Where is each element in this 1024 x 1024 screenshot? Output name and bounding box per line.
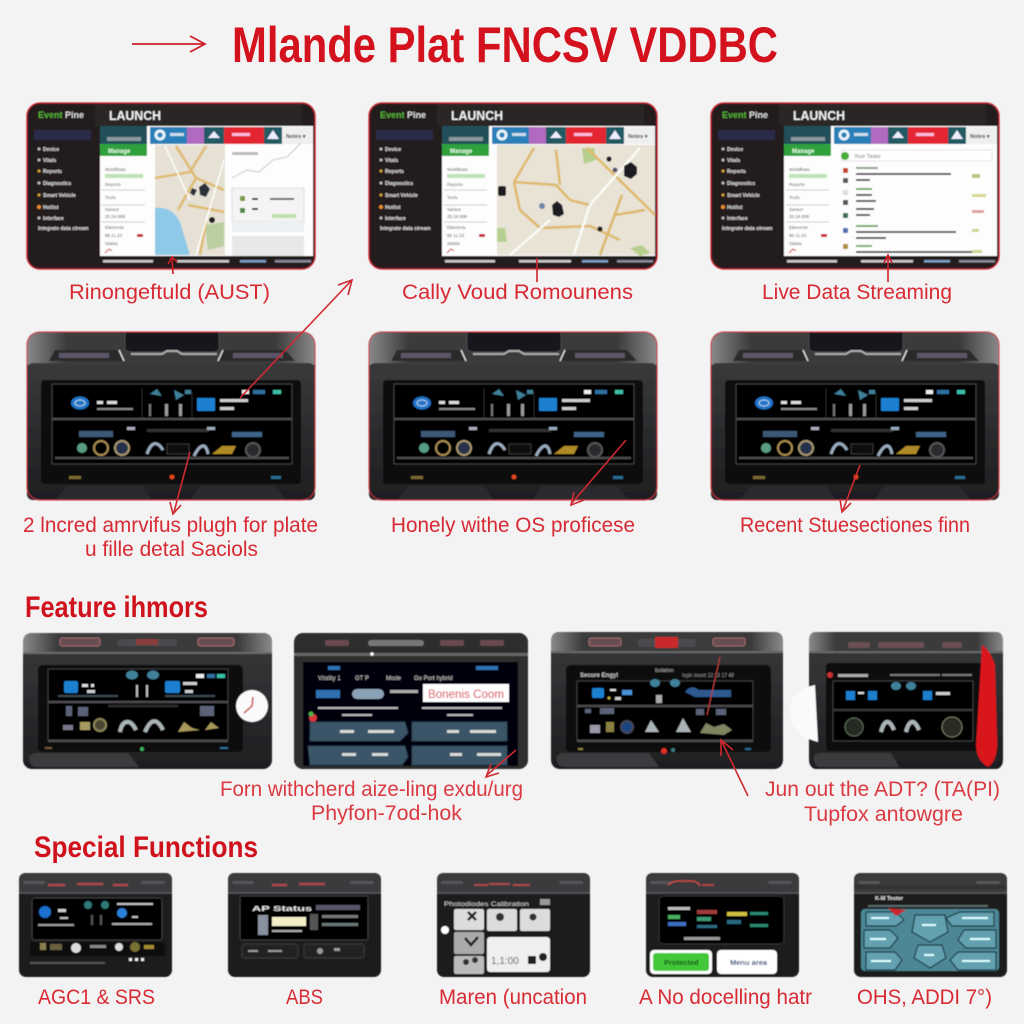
panel: device one [27,332,315,500]
button: white action [717,950,777,974]
panel: ABS device [228,873,381,977]
arrow: device three callout [840,465,860,512]
map: city with bay [155,145,225,255]
arrow: device one callout [170,452,190,514]
label: panel one: Rinongeftuld (AUST) [69,281,270,304]
panel: feature device two [294,633,528,769]
label: feature right [765,778,1000,826]
label: feature right: Jun out the ADT? (TA(PI) [765,778,1000,801]
panel: manual function device: Photodiodes Calibration [444,901,529,908]
arrow: panel three marker [884,255,892,282]
panel: feature device two: Vitality 1 [318,676,341,682]
heading: features: Feature ihmors [25,591,208,624]
label: AGC and SRS: AGC1 & SRS [38,986,155,1009]
arrow: device two feature callout [486,750,516,777]
panel: map and chart screen [27,103,315,269]
panel: feature device one [23,633,272,769]
arrow: device three feature callout [721,740,748,796]
panel: teal diagram device: K-M Tester [875,896,904,902]
panel: feature device four [790,632,1003,769]
label: feature left: Phyfon-7od-hok [311,802,463,825]
panel: green and white button device [646,873,799,977]
label: device two: Honely withe OS proficese [391,514,635,537]
button: green action [650,950,712,974]
label: manual function: Maren (uncation [439,986,587,1009]
panel: live data screen [711,103,999,269]
label: ABS: ABS [286,986,323,1009]
label: feature left: Forn withcherd aize-ling exdu/urg [220,778,523,801]
arrow: panel one marker [168,257,177,274]
panel: feature device two: Go Port hybrid [414,676,453,682]
panel: ABS device: AP Status [252,906,312,913]
panel: feature device three: Isolation [655,668,674,674]
icon: clock badge [236,690,268,722]
label: OHS: OHS, ADDI 7°) [857,986,992,1009]
panel: full map screen [369,103,657,269]
panel: feature device three [551,632,783,769]
label: feature left [220,778,523,825]
panel: feature device two: GT P [355,676,369,682]
label: device one: u fille detal Saciols [85,538,258,561]
panel: manual function device: 1,1:00 [491,956,519,967]
buttons: function grid [454,909,550,974]
panel: AGC and SRS device [19,873,172,977]
panel: teal diagram device [854,873,1007,977]
map: road network [497,145,655,256]
icon: white side tab [790,685,818,742]
label: feature right: Tupfox antowgre [804,803,963,826]
arrow: diagonal callout to upper row [240,280,352,398]
arrow: title pointer [132,36,205,52]
panel: manual function device [437,873,590,977]
callout: red label box: Bonenis Coom [428,689,504,701]
panel: device three [711,332,999,500]
label: device three: Recent Stuesectiones finn [740,514,970,537]
panel: device two [369,332,657,500]
panel: live data screen: Your Tasks [854,154,881,160]
button: green action: Protected [664,958,699,967]
button: white action: Menu area [730,958,768,967]
label: panel two: Cally Voud Romounens [402,281,633,304]
arrow: faint interior pointer [707,657,720,715]
panel: feature device three: Secure Engyl [580,673,618,679]
callout: red label box [423,684,509,702]
label: docelling: A No docelling hatr [639,986,812,1009]
heading: special functions: Special Functions [34,831,258,864]
label: panel three: Live Data Streaming [762,281,952,304]
label: device one [23,514,318,561]
panel: feature device three: login insert 12 13 17 48 [682,673,734,679]
panel: feature device two: Mode [386,676,402,682]
arrow: device two callout [571,440,626,505]
title: Mlande Plat FNCSV VDDBC [232,17,778,73]
arrow: panel two marker [536,258,538,282]
label: device one: 2 lncred amrvifus plugh for plate [23,514,318,537]
marker: red side bar [976,645,997,767]
